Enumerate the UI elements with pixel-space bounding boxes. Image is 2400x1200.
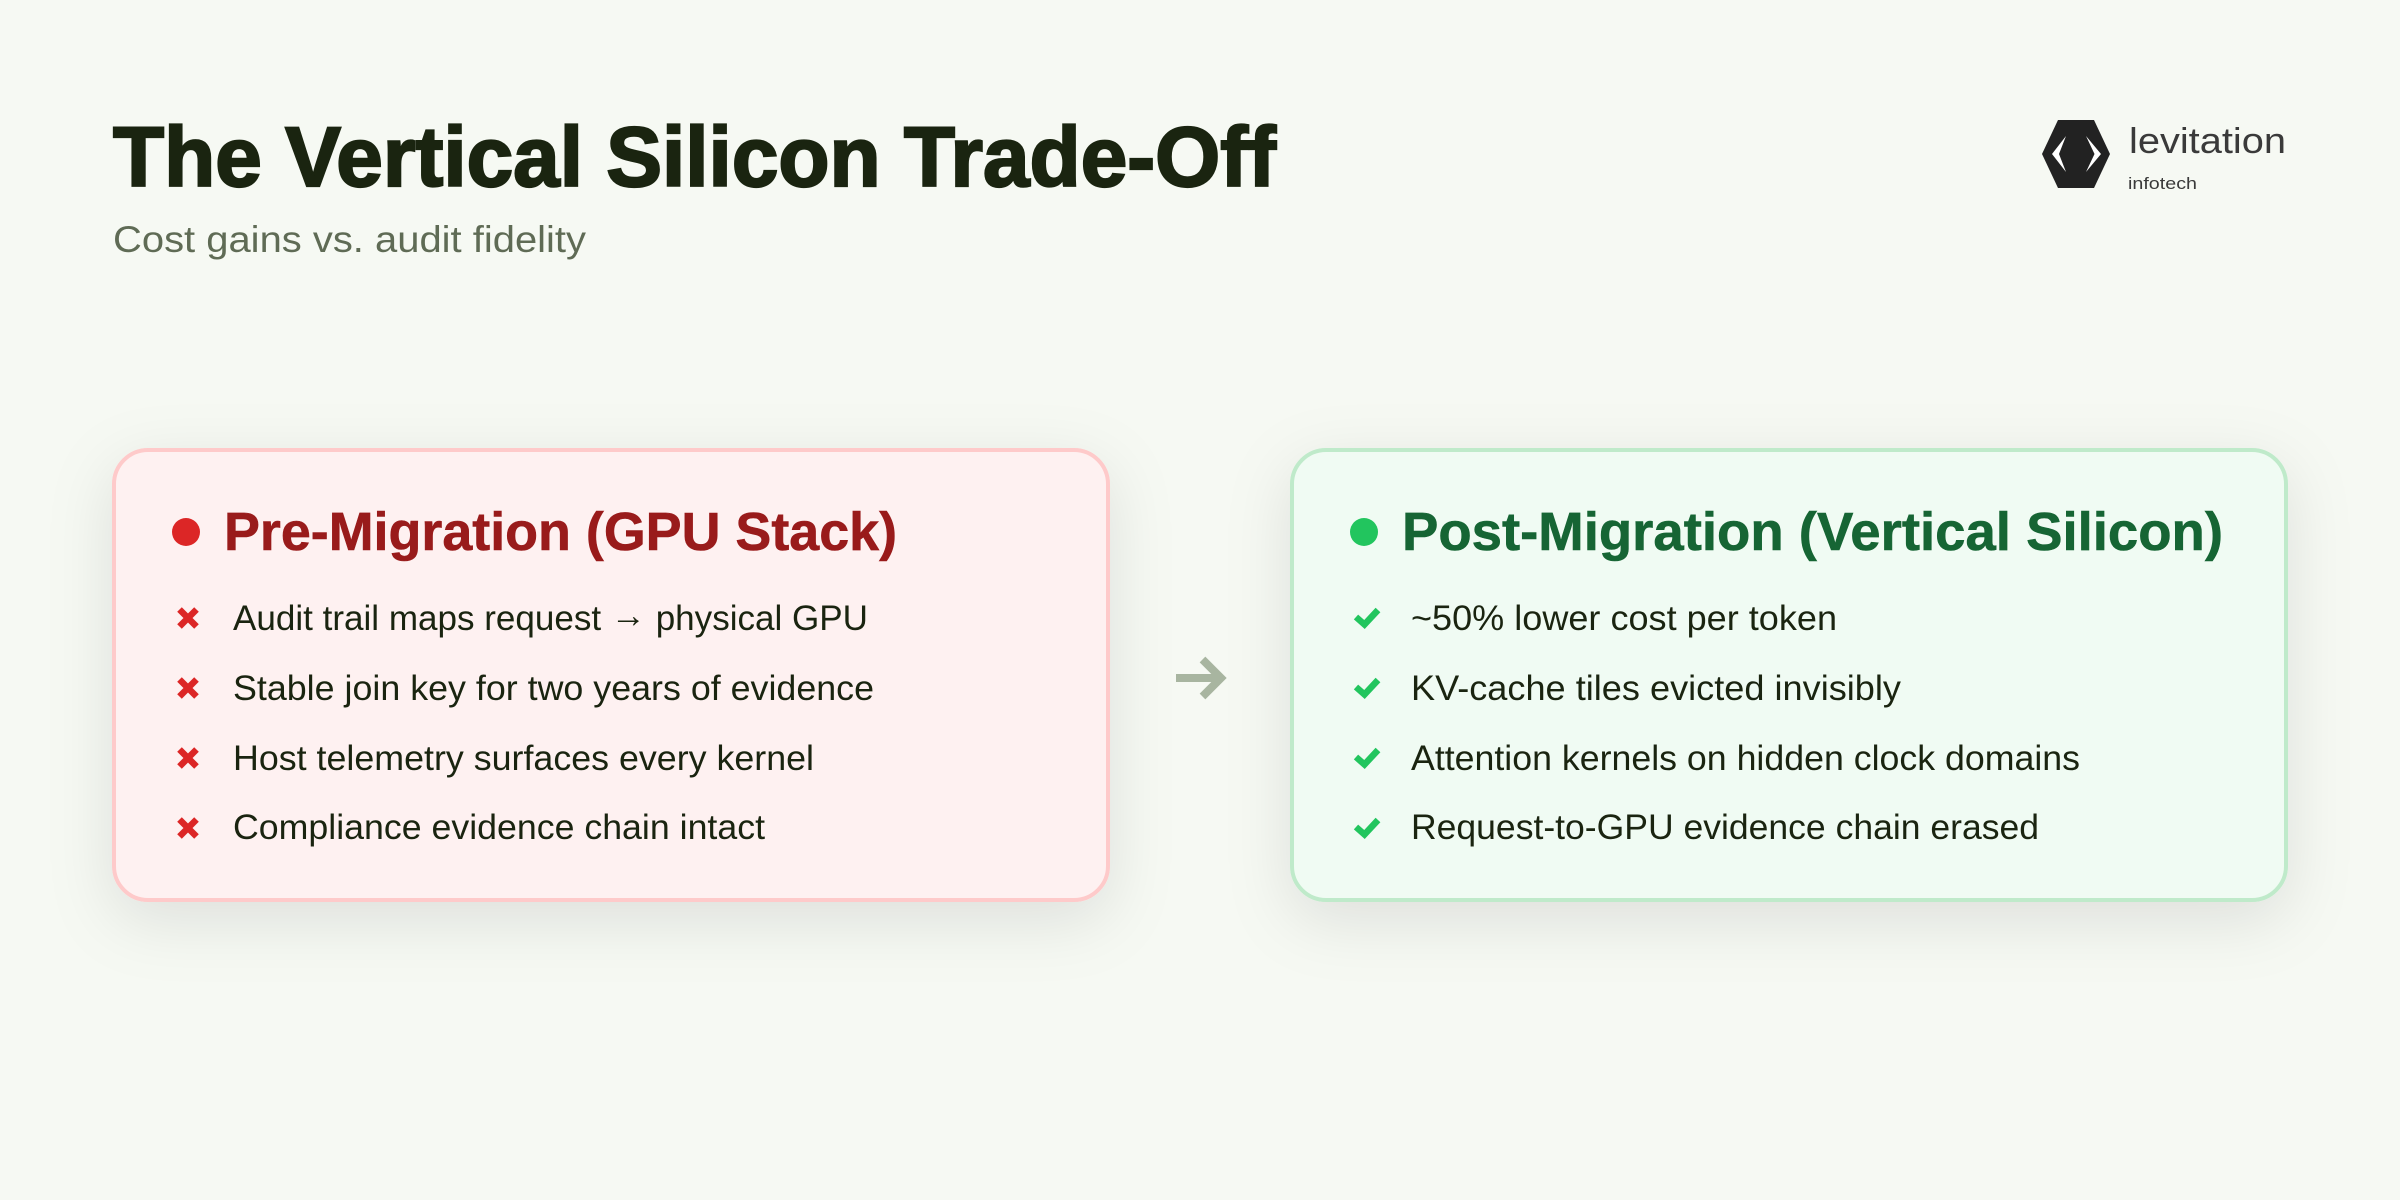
status dot (1350, 518, 1378, 546)
panel: post-migration (1292, 450, 2286, 900)
list row 3: Host telemetry surfaces every kernel (233, 739, 814, 778)
arrow (1176, 660, 1221, 696)
list row 4: Compliance evidence chain intact (233, 808, 765, 847)
list row 2: Stable join key for two years of evidence (233, 669, 874, 708)
panel background (1292, 450, 2286, 900)
list row 2: KV-cache tiles evicted invisibly (1411, 669, 1902, 708)
list row 1 (180, 596, 868, 638)
status dot (172, 518, 200, 546)
logo: levitation infotech (2042, 120, 2286, 193)
list row 1: physical GPU (646, 599, 868, 638)
list row 4: Request-to-GPU evidence chain erased (1411, 808, 2039, 847)
list row 1: ~50% lower cost per token (1411, 599, 1837, 638)
list row 1: Audit trail maps request (233, 599, 601, 638)
panel background (114, 450, 1108, 900)
list row 1: → (611, 596, 646, 635)
panel: pre-migration (114, 450, 1108, 900)
icon: hexagon logo mark (2042, 120, 2110, 188)
subtitle: Cost gains vs. audit fidelity (113, 219, 587, 260)
logo wordmark: levitation (2129, 120, 2286, 161)
title: The Vertical Silicon Trade-Off (113, 110, 1277, 204)
logo subtext: infotech (2128, 174, 2197, 193)
list row 3: Attention kernels on hidden clock domains (1411, 739, 2080, 778)
panel heading: Pre-Migration (GPU Stack) (224, 502, 897, 562)
panel heading: Post-Migration (Vertical Silicon) (1402, 502, 2223, 562)
